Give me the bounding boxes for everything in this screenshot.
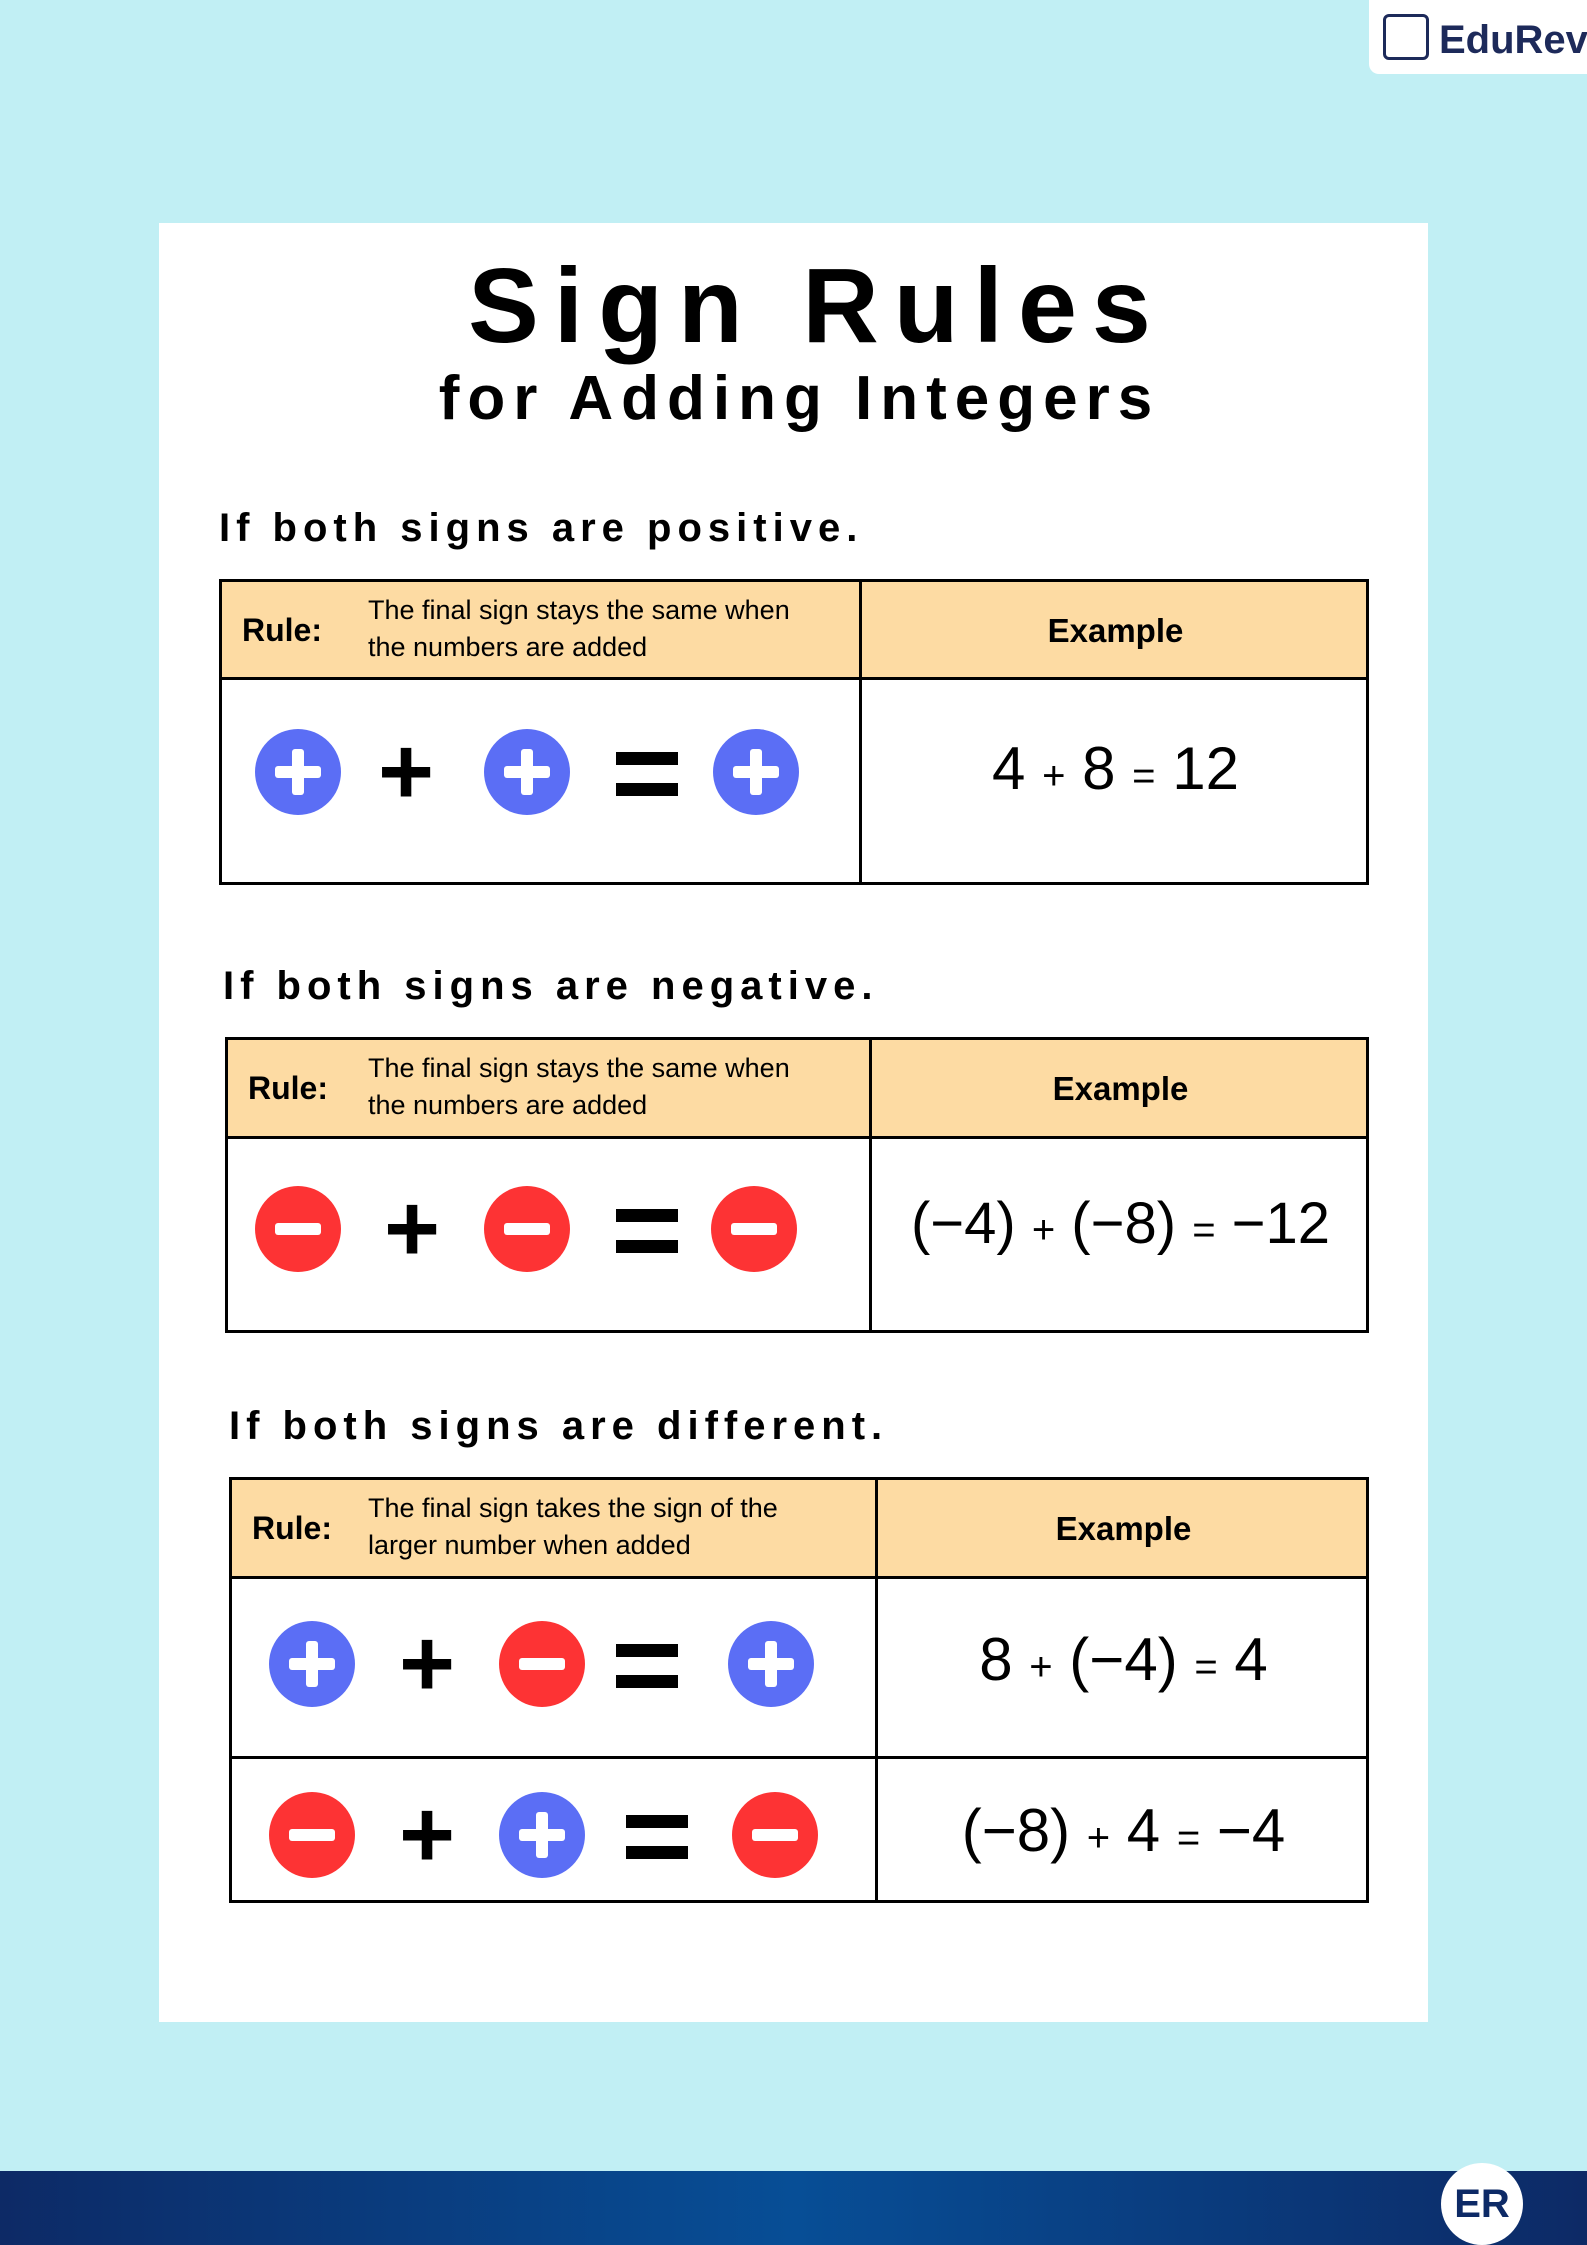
- table: positive: 4 + 8 = 12: [992, 735, 1239, 802]
- table: negative: [225, 1037, 1369, 1333]
- table: different: +: [399, 1610, 455, 1717]
- table: negative: Rule:: [248, 1070, 328, 1106]
- logo: EduRev: EduRev: [1439, 18, 1587, 62]
- table: positive: Rule:: [242, 612, 322, 648]
- table: different: Example: [1056, 1510, 1191, 1547]
- footer logo: ER: [1441, 2163, 1523, 2245]
- white panel: [159, 223, 1428, 2022]
- table: negative: (−4) + (−8) = −12: [911, 1191, 1330, 1256]
- footer logo: ER: ER: [1454, 2182, 1510, 2226]
- table: different: [229, 1477, 1369, 1903]
- table: negative: +: [384, 1175, 440, 1282]
- subtitle: for Adding Integers: [439, 364, 1160, 433]
- table: different: +: [399, 1781, 455, 1888]
- heading: different: If both signs are different.: [229, 1404, 888, 1448]
- footer bar: [0, 2171, 1587, 2245]
- table: different: The final sign takes the sign of the: [368, 1493, 778, 1523]
- table: different: larger number when added: [368, 1530, 691, 1560]
- heading: negative: If both signs are negative.: [223, 964, 878, 1008]
- table: positive: [219, 579, 1369, 885]
- table: positive: +: [378, 718, 434, 825]
- table: different: 8 + (−4) = 4: [979, 1626, 1268, 1693]
- logo: EduRev: [1369, 0, 1587, 74]
- table: positive: The final sign stays the same when: [368, 595, 790, 625]
- table: negative: Example: [1053, 1070, 1188, 1107]
- heading: positive: If both signs are positive.: [219, 506, 863, 550]
- table: negative: the numbers are added: [368, 1090, 647, 1120]
- table: positive: Example: [1048, 612, 1183, 649]
- table: negative: The final sign stays the same when: [368, 1053, 790, 1083]
- table: positive: the numbers are added: [368, 632, 647, 662]
- table: different: Rule:: [252, 1510, 332, 1546]
- title: Sign Rules: [468, 247, 1166, 365]
- table: different: (−8) + 4 = −4: [962, 1797, 1285, 1864]
